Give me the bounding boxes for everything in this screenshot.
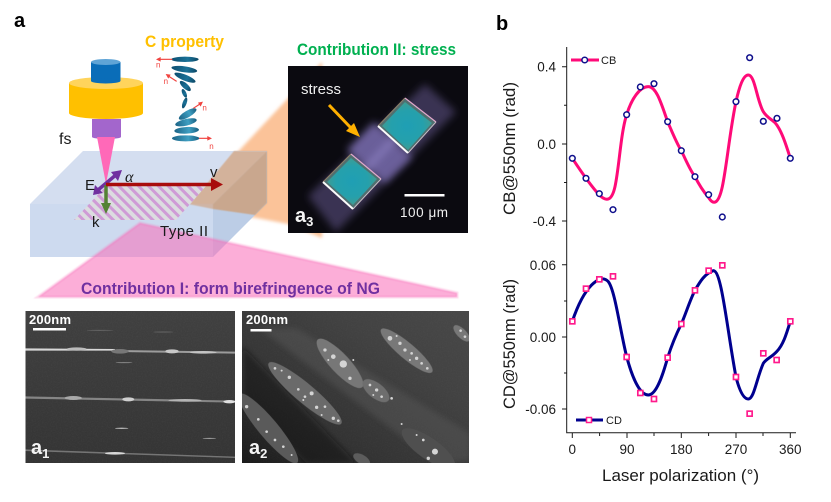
chiral helix icon: n: [156, 60, 160, 69]
a2 tag: a: [249, 437, 260, 459]
a1 tag: 1: [42, 446, 49, 461]
schematic labels: [59, 131, 218, 194]
y tick labels: -0.4: [533, 214, 556, 229]
glass block with laser writing schematic: [30, 59, 267, 257]
a2 scale bar: 200nm: [246, 312, 288, 327]
panel a1: SEM nanograting: [25, 311, 235, 463]
laser cone: [97, 137, 115, 184]
a1 scale bar: [29, 315, 70, 330]
block labels over beam: Type II: [160, 223, 208, 240]
focusing objective: [69, 59, 143, 139]
direction arrow k: [101, 185, 111, 214]
a3 tag: a: [295, 205, 306, 227]
hatched Type II region: [74, 186, 206, 220]
Contribution II heading: Contribution II: stress: [297, 41, 456, 59]
CD legend: [576, 415, 622, 427]
chiral helix icon: n: [202, 104, 207, 113]
CB legend: CB: [601, 55, 616, 67]
upper birefringent square: [378, 98, 436, 153]
nanograting lines: [25, 330, 235, 458]
CB legend: [571, 55, 616, 67]
a1 scale bar: 200nm: [29, 312, 71, 327]
chiral helix icon: [156, 57, 214, 151]
x tick labels: 0: [569, 442, 576, 457]
orange projection beam to stress panel: [188, 62, 322, 238]
stress label: stress: [301, 81, 341, 98]
panel label a: a: [14, 10, 26, 32]
panel label b: b: [496, 13, 508, 35]
block labels over beam: [92, 214, 208, 240]
lower birefringent square: [323, 154, 381, 209]
y tick labels: 0.0: [537, 137, 556, 152]
x tick labels: 360: [779, 442, 802, 457]
orange overlay on block: [188, 151, 267, 215]
schematic labels: v: [210, 164, 218, 181]
x axis title: Laser polarization (°): [602, 466, 759, 485]
a2 tag: 2: [260, 446, 267, 461]
block labels over beam: k: [92, 214, 100, 231]
y tick labels: -0.06: [525, 402, 556, 417]
CD curve and points: [570, 263, 793, 416]
CD legend: CD: [606, 415, 622, 427]
C property heading: C property: [145, 32, 224, 51]
x tick labels: 180: [670, 442, 693, 457]
yellow stress arrow: [329, 105, 360, 137]
schematic labels: E: [85, 177, 95, 194]
y tick labels: 0.4: [537, 60, 556, 74]
x tick labels: [569, 442, 802, 457]
scale bar 100 um: 100 μm: [400, 205, 448, 220]
y tick labels: 0.00: [530, 330, 556, 345]
schematic labels: α: [125, 169, 134, 186]
schematic labels: fs: [59, 131, 71, 148]
elongated nanopores: [242, 325, 469, 463]
bright nanoparticles: [245, 329, 466, 460]
CB curve and points: [569, 55, 793, 220]
glass block: [30, 151, 267, 257]
chart axes: [562, 47, 796, 438]
chiral helix icon: n: [164, 77, 168, 86]
chiral helix icon: n: [209, 142, 214, 151]
x tick labels: 270: [725, 442, 747, 457]
polarization arrow E: [93, 170, 122, 195]
a2 scale bar: [246, 315, 288, 332]
stress glow band: [308, 84, 456, 232]
x tick labels: 90: [619, 442, 635, 457]
pink projection beam: [38, 223, 457, 297]
Contribution I heading: Contribution I: form birefringence of NG: [81, 280, 380, 298]
y axis title CD: CD@550nm (rad): [500, 279, 519, 409]
panel a2: SEM nanoparticles: [232, 311, 472, 475]
y axis title CB: CB@550nm (rad): [500, 82, 519, 215]
a3 tag: 3: [306, 214, 313, 229]
diagonal contrast bands: [260, 328, 470, 463]
y tick labels: 0.06: [530, 258, 556, 273]
a1 tag: a: [31, 437, 42, 459]
writing direction arrow v: [106, 178, 223, 191]
scale bar 100 um: [400, 194, 448, 220]
y tick labels: [525, 60, 556, 417]
panel a3: stress micrograph: [288, 66, 468, 233]
